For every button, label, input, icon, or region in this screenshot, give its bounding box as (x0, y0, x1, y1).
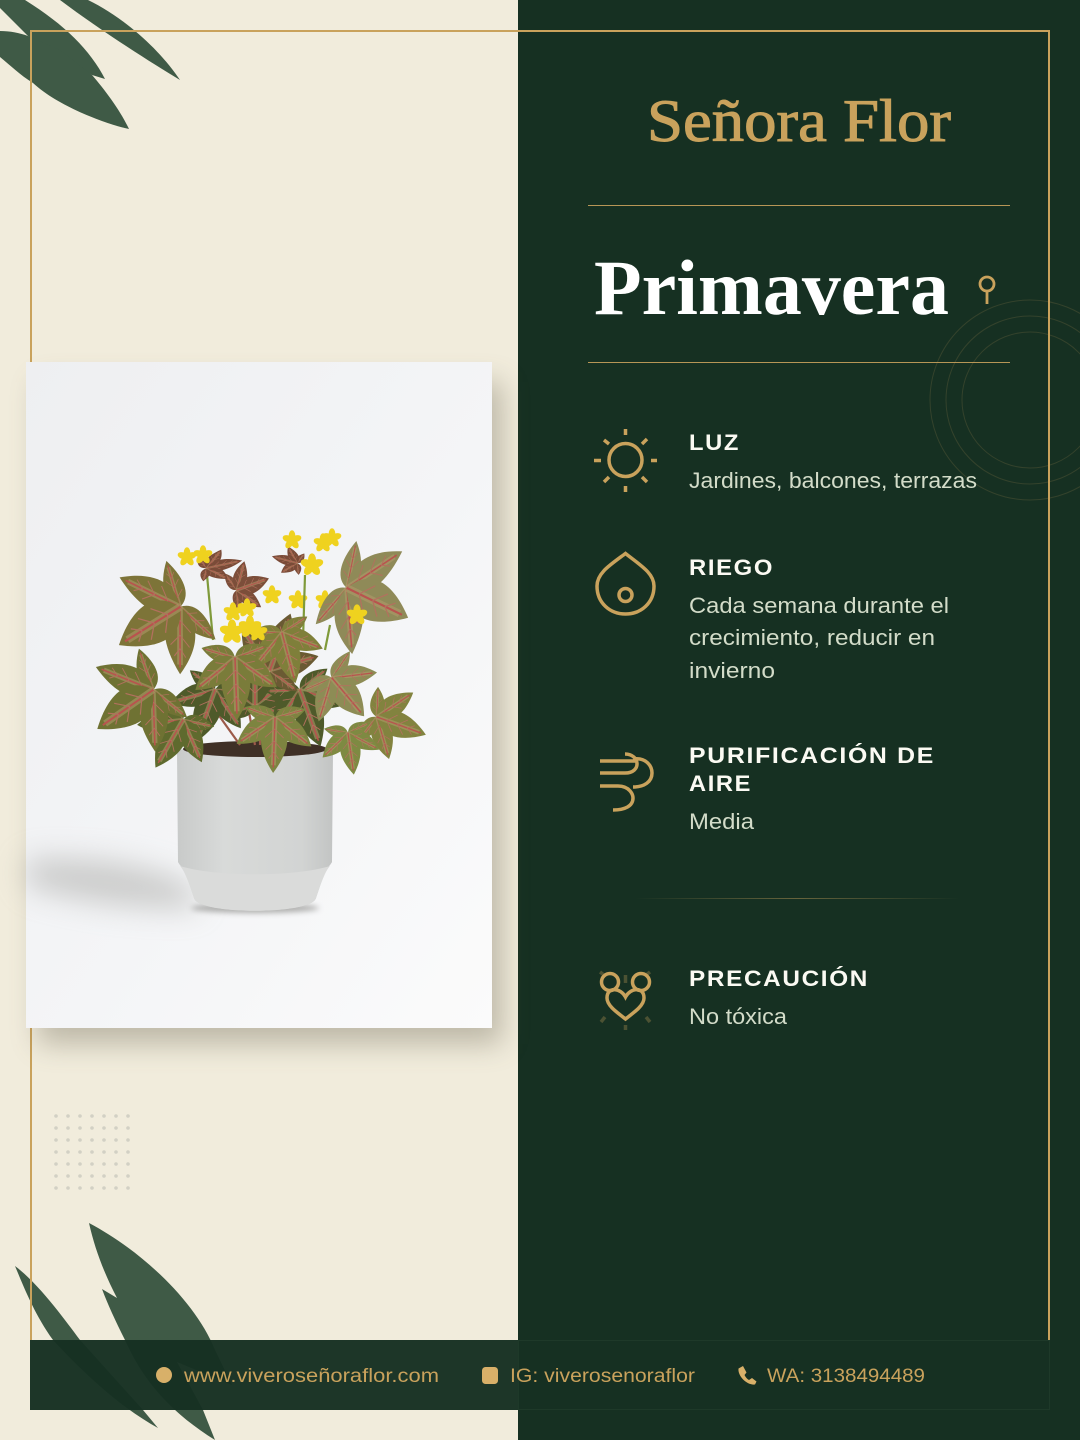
floor shadow (26, 859, 200, 908)
footer bar (30, 1340, 1050, 1410)
icon: sun (594, 429, 657, 492)
decoration: top left leaves (0, 0, 180, 129)
icon: pin (980, 277, 994, 304)
plant name heading: Primavera (594, 244, 949, 331)
text: luz: Jardines, balcones, terrazas (689, 468, 977, 493)
plant flowers (177, 528, 368, 645)
heading: purificacion (689, 743, 935, 796)
heading: purificacion: PURIFICACIÓN DE (689, 743, 935, 768)
contact: website: www.viveroseñoraflor.com (183, 1366, 439, 1387)
text: riego (689, 593, 949, 683)
decoration: concentric circles (930, 300, 1080, 500)
heading: precaucion: PRECAUCIÓN (689, 966, 869, 991)
plant stems (183, 575, 340, 745)
panel: cream background (0, 0, 518, 1440)
plant leaves (63, 518, 440, 790)
heading: luz: LUZ (689, 430, 740, 455)
decoration: dot grid (54, 1114, 130, 1190)
contact: whatsapp: WA: 3138494489 (767, 1366, 925, 1387)
heading: purificacion: AIRE (689, 771, 752, 796)
item: luz (594, 429, 977, 493)
item: purificacion de aire (600, 743, 935, 834)
icon: heart with rings (600, 972, 650, 1030)
decoration: bottom left leaves (15, 1223, 232, 1440)
panel: dark green background (518, 0, 1080, 1440)
text: no toxica: No tóxica (689, 1004, 788, 1029)
text: riego: Cada semana durante el (689, 593, 949, 618)
photo card: potted plant (26, 362, 502, 1044)
contact: instagram: IG: viverosenoraflor (510, 1366, 696, 1387)
item: riego (597, 554, 949, 683)
text: riego: crecimiento, reducir en (689, 625, 935, 650)
item: precaucion (600, 966, 869, 1030)
brand title: Señora Flor (647, 88, 951, 154)
icon: wind (600, 754, 652, 810)
heading: riego: RIEGO (689, 555, 774, 580)
text: media: Media (689, 809, 755, 834)
pot (177, 741, 333, 913)
plant flowers behind leaves (262, 585, 335, 610)
icon: water drop (597, 554, 654, 614)
text: riego: invierno (689, 658, 775, 683)
